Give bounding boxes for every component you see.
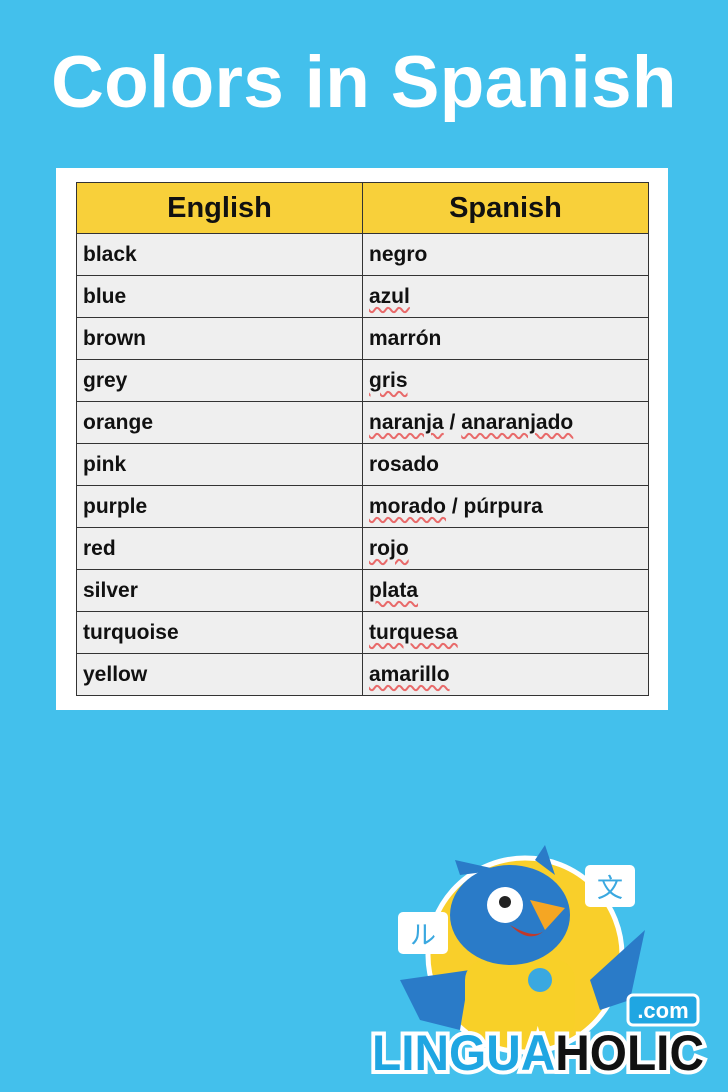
- panel: color table: [56, 168, 668, 710]
- title: Colors in Spanish: [51, 42, 677, 123]
- table: gris: [369, 368, 408, 392]
- table: orange: [83, 410, 153, 434]
- table: plata: [369, 578, 418, 602]
- table: marrón: [369, 326, 441, 350]
- table: black: [83, 242, 137, 266]
- table: brown: [83, 326, 146, 350]
- table: grey: [83, 368, 127, 392]
- icon: speech bubble left: ル: [410, 915, 436, 952]
- icon: yellow circle: [428, 858, 622, 1052]
- icon: .com tag: .com: [637, 998, 689, 1023]
- table: naranja / anaranjado: [369, 410, 573, 434]
- table: negro: [369, 242, 427, 266]
- table: Spanish: [449, 192, 562, 224]
- table: morado / púrpura: [369, 494, 543, 518]
- table: amarillo: [369, 662, 450, 686]
- logo text: LINGUAHOLIC: [372, 1025, 704, 1081]
- icon: speech bubble right: 文: [597, 868, 623, 905]
- logo: linguaholic: [371, 845, 708, 1081]
- table: azul: [369, 284, 410, 308]
- icon: owl: [400, 845, 645, 1040]
- icon: .com tag: [628, 995, 698, 1025]
- table: silver: [83, 578, 138, 602]
- table: yellow: [83, 662, 147, 686]
- icon: speech bubble right: [585, 865, 635, 907]
- table: turquesa: [369, 620, 458, 644]
- table: red: [83, 536, 116, 560]
- table: purple: [83, 494, 147, 518]
- table: rojo: [369, 536, 409, 560]
- table: English: [167, 192, 272, 224]
- table: [76, 182, 649, 696]
- table: rosado: [369, 452, 439, 476]
- table: turquoise: [83, 620, 179, 644]
- icon: speech bubble left: [398, 912, 448, 954]
- table: pink: [83, 452, 126, 476]
- table: blue: [83, 284, 126, 308]
